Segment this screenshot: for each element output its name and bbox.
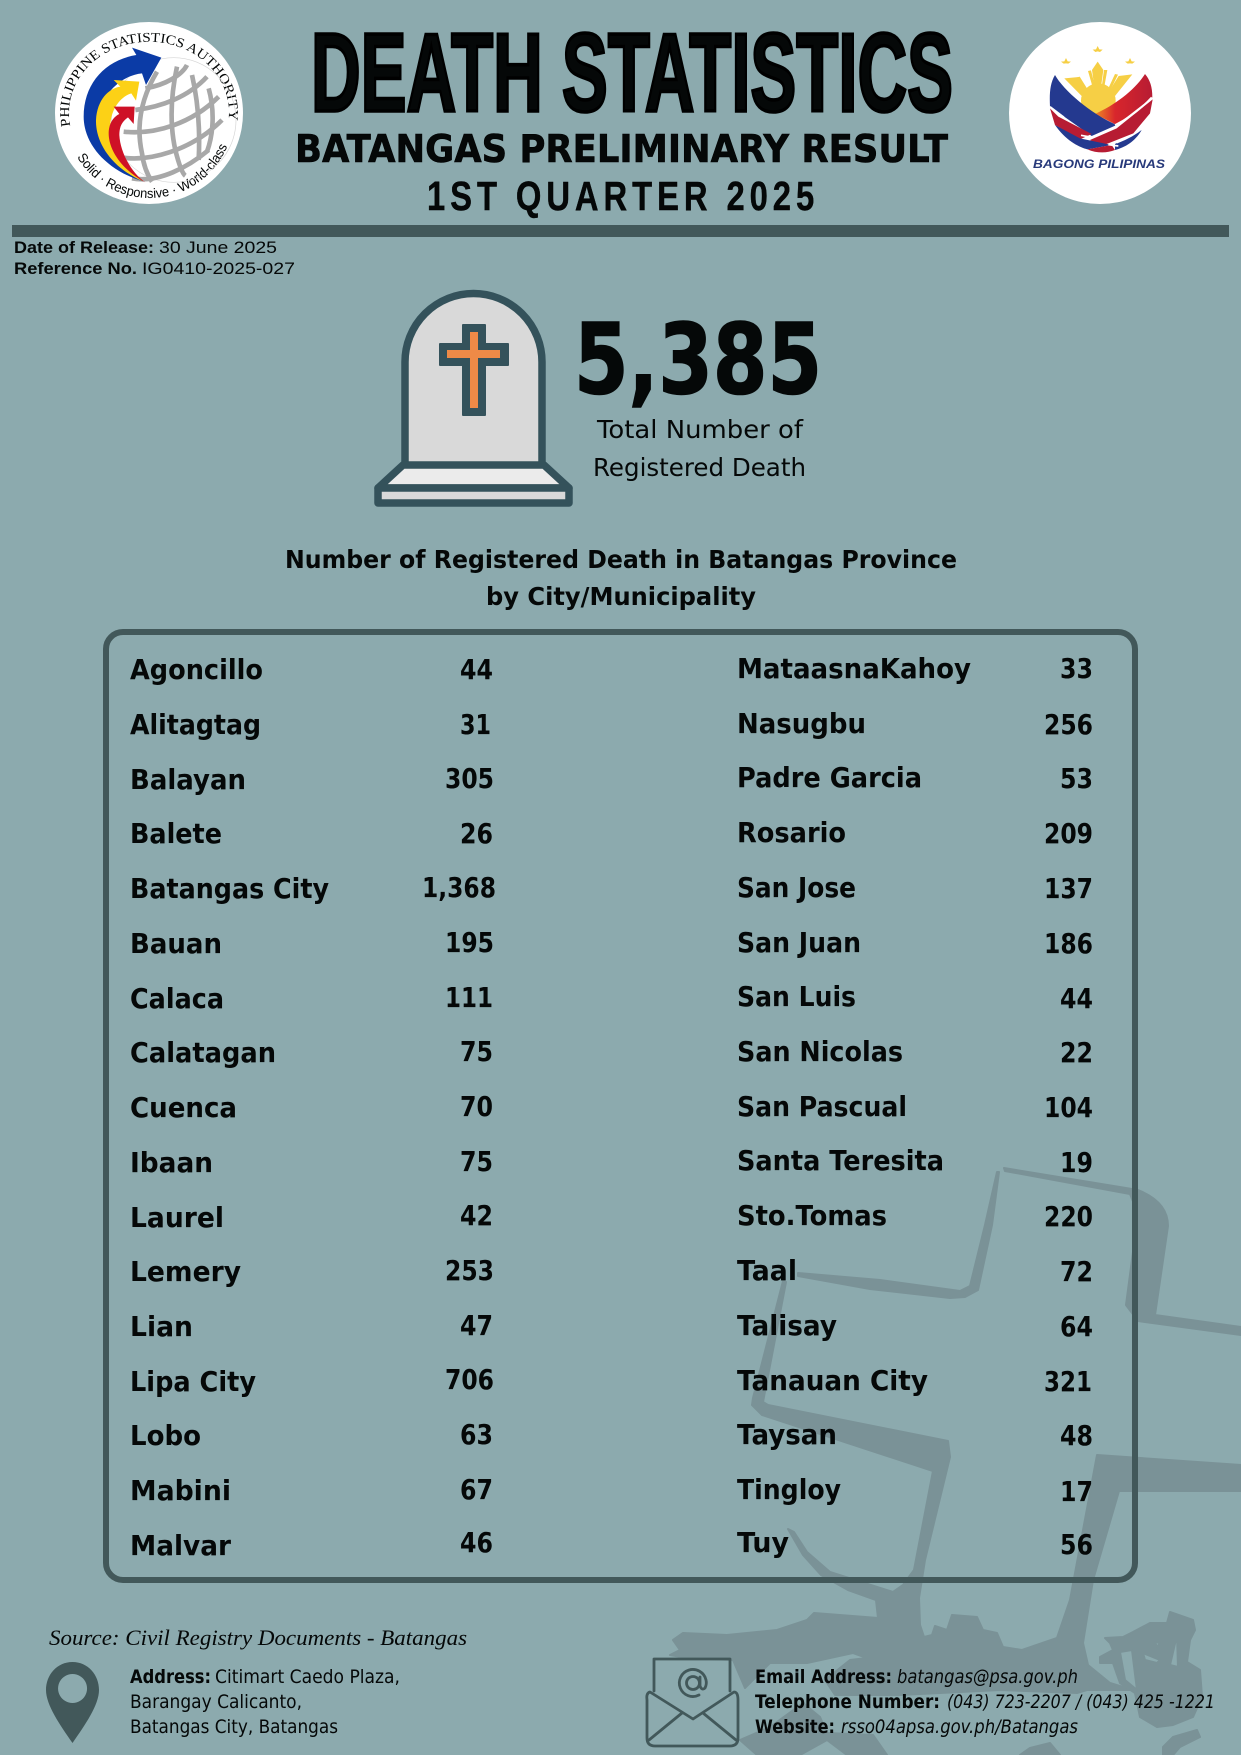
row: Tuy [737, 1527, 1093, 1561]
row: MataasnaKahoy: MataasnaKahoy [737, 653, 971, 685]
total label: Registered Death [593, 453, 806, 482]
row: Balayan: Balayan [130, 764, 246, 796]
row: Lobo: 63 [460, 1419, 493, 1451]
row: Lobo [130, 1419, 493, 1452]
right column: municipalities [737, 653, 1093, 1561]
row: Bauan: 195 [445, 927, 494, 959]
row: San Pascual: San Pascual [737, 1091, 907, 1123]
total label: Total Number of [596, 415, 804, 444]
row: Tanauan City [737, 1365, 1092, 1398]
row: San Jose: 137 [1044, 873, 1093, 905]
row: Calatagan: 75 [460, 1036, 493, 1068]
row: Malvar: 46 [460, 1527, 493, 1559]
row: Laurel [130, 1200, 493, 1234]
row: Lemery [130, 1255, 494, 1288]
row: San Luis: 44 [1060, 983, 1093, 1015]
row: San Juan: San Juan [737, 927, 861, 959]
row: San Pascual: 104 [1044, 1092, 1093, 1124]
logo: Bagong Pilipinas: BAGONG PILIPINAS [1033, 157, 1165, 171]
contact details: batangas@psa.gov.ph [897, 1667, 1078, 1688]
row: Batangas City: 1,368 [422, 872, 496, 904]
contact details: Website: [755, 1717, 835, 1738]
row: Balete [130, 818, 493, 850]
row: Lipa City: Lipa City [130, 1366, 256, 1398]
row: Ibaan: Ibaan [130, 1147, 213, 1179]
row: Taal: 72 [1060, 1256, 1093, 1288]
background watermark: tombstone illustration [670, 1168, 1241, 1755]
contact details: Email Address: [755, 1667, 892, 1688]
subtitle: quarter: 1ST QUARTER 2025 [427, 172, 814, 219]
row: Calaca: Calaca [130, 983, 224, 1015]
row: Mabini [130, 1474, 493, 1507]
address block: Address: [130, 1667, 211, 1688]
row: Agoncillo: Agoncillo [130, 654, 263, 686]
row: Tuy: Tuy [737, 1527, 789, 1559]
row: Lian: 47 [460, 1310, 493, 1342]
row: Cuenca: 70 [460, 1091, 493, 1123]
row: Calaca: 111 [445, 982, 493, 1014]
row: San Juan: 186 [1044, 928, 1093, 960]
row: San Pascual [737, 1091, 1093, 1124]
row: Alitagtag: Alitagtag [130, 709, 261, 741]
row: Malvar: Malvar [130, 1530, 231, 1562]
row: Laurel: Laurel [130, 1202, 224, 1234]
address block: Citimart Caedo Plaza, [215, 1667, 400, 1688]
contact details [755, 1667, 1215, 1738]
address block [130, 1667, 400, 1738]
row: Taal: Taal [737, 1255, 797, 1287]
row: Tingloy: 17 [1060, 1476, 1093, 1508]
row: Balete: 26 [460, 818, 493, 850]
row: Tanauan City: Tanauan City [737, 1365, 928, 1397]
total registered deaths figure: 5,385 [574, 303, 822, 416]
reference number: IG0410-2025-027 [142, 260, 295, 278]
row: Lemery: Lemery [130, 1256, 241, 1288]
row: Balayan: 305 [445, 763, 494, 795]
row: Rosario [737, 817, 1093, 850]
row: Bauan [130, 927, 494, 960]
table heading [285, 545, 957, 611]
row: Padre Garcia: 53 [1060, 763, 1093, 795]
row: Laurel: 42 [460, 1200, 493, 1232]
row: Calatagan [130, 1036, 493, 1069]
row: Talisay [737, 1310, 1093, 1343]
table panel frame [106, 632, 1135, 1580]
table heading: by City/Municipality [486, 582, 756, 611]
row: Rosario: 209 [1044, 818, 1093, 850]
row: Sto.Tomas [737, 1200, 1093, 1233]
row: Batangas City: Batangas City [130, 873, 329, 905]
row: Balete: Balete [130, 818, 222, 850]
table heading: Number of Registered Death in Batangas Province [285, 545, 957, 574]
row: Taal [737, 1255, 1093, 1288]
release date: Date of Release: [14, 239, 154, 257]
icon: envelope with at sign [647, 1659, 738, 1746]
logo: Philippine Statistics Authority: PHILIPPINE STATISTICS AUTHORITY [60, 32, 238, 127]
row: Nasugbu: Nasugbu [737, 708, 866, 740]
row: Cuenca: Cuenca [130, 1092, 237, 1124]
row: Lian: Lian [130, 1311, 193, 1343]
row: Padre Garcia [737, 762, 1093, 795]
row: Taysan: 48 [1060, 1420, 1093, 1452]
row: San Nicolas: 22 [1060, 1037, 1093, 1069]
row: Lipa City: 706 [445, 1364, 494, 1396]
row: Taysan [737, 1419, 1093, 1452]
row: Nasugbu: 256 [1044, 709, 1093, 741]
icon: location pin [46, 1662, 99, 1743]
reference number: Reference No. [14, 260, 137, 278]
row: Alitagtag [130, 709, 491, 741]
row: MataasnaKahoy: 33 [1060, 653, 1093, 685]
logo: Bagong Pilipinas [1009, 22, 1191, 204]
source note: Source: Civil Registry Documents - Batangas [49, 1625, 467, 1650]
row: Padre Garcia: Padre Garcia [737, 762, 922, 794]
row: Talisay: Talisay [737, 1310, 837, 1342]
row: Santa Teresita [737, 1145, 1093, 1179]
row: Agoncillo [130, 654, 493, 686]
row: San Nicolas [737, 1036, 1093, 1069]
row: Calatagan: Calatagan [130, 1037, 276, 1069]
row: Mabini: 67 [460, 1474, 493, 1506]
row: Tingloy [737, 1474, 1093, 1508]
logo: Philippine Statistics Authority: Solid · Responsive · World-class [78, 144, 227, 198]
row: Taysan: Taysan [737, 1419, 837, 1451]
row: San Luis: San Luis [737, 981, 856, 1013]
row: Batangas City [130, 872, 496, 905]
row: Lian [130, 1310, 493, 1343]
row: Lemery: 253 [445, 1255, 494, 1287]
row: Calaca [130, 982, 493, 1015]
row: Sto.Tomas: Sto.Tomas [737, 1200, 887, 1232]
row: Agoncillo: 44 [460, 654, 493, 686]
subtitle: Batangas preliminary result: BATANGAS PRELIMINARY RESULT [295, 127, 948, 171]
total label [593, 415, 806, 482]
row: Nasugbu [737, 708, 1093, 741]
row: Rosario: Rosario [737, 817, 846, 849]
row: Balayan [130, 763, 494, 796]
row: Lipa City [130, 1364, 494, 1398]
contact details: rsso04apsa.gov.ph/Batangas [841, 1717, 1078, 1738]
row: MataasnaKahoy [737, 653, 1093, 685]
header divider bar [12, 225, 1229, 237]
row: Malvar [130, 1527, 493, 1562]
logo: Philippine Statistics Authority [55, 22, 243, 204]
left column: municipalities [130, 654, 496, 1562]
row: Santa Teresita: 19 [1060, 1147, 1093, 1179]
row: Mabini: Mabini [130, 1475, 231, 1507]
contact details: Telephone Number: [755, 1692, 940, 1713]
address block: Barangay Calicanto, [130, 1692, 302, 1713]
row: Ibaan: 75 [460, 1146, 493, 1178]
row: Bauan: Bauan [130, 928, 222, 960]
row: Santa Teresita: Santa Teresita [737, 1145, 944, 1177]
row: Talisay: 64 [1060, 1311, 1093, 1343]
row: Lobo: Lobo [130, 1420, 201, 1452]
row: Tuy: 56 [1060, 1529, 1093, 1561]
row: San Nicolas: San Nicolas [737, 1036, 903, 1068]
row: Alitagtag: 31 [460, 709, 491, 741]
row: San Jose: San Jose [737, 872, 856, 904]
release date: 30 June 2025 [159, 239, 277, 257]
row: Cuenca [130, 1091, 493, 1124]
row: San Juan [737, 927, 1093, 960]
row: Tanauan City: 321 [1044, 1366, 1092, 1398]
row: San Luis [737, 981, 1093, 1015]
row: Tingloy: Tingloy [737, 1474, 841, 1506]
icon: tombstone with cross [378, 293, 569, 503]
row: San Jose [737, 872, 1093, 905]
row: Ibaan [130, 1146, 493, 1179]
row: Sto.Tomas: 220 [1044, 1201, 1093, 1233]
address block: Batangas City, Batangas [130, 1717, 338, 1738]
